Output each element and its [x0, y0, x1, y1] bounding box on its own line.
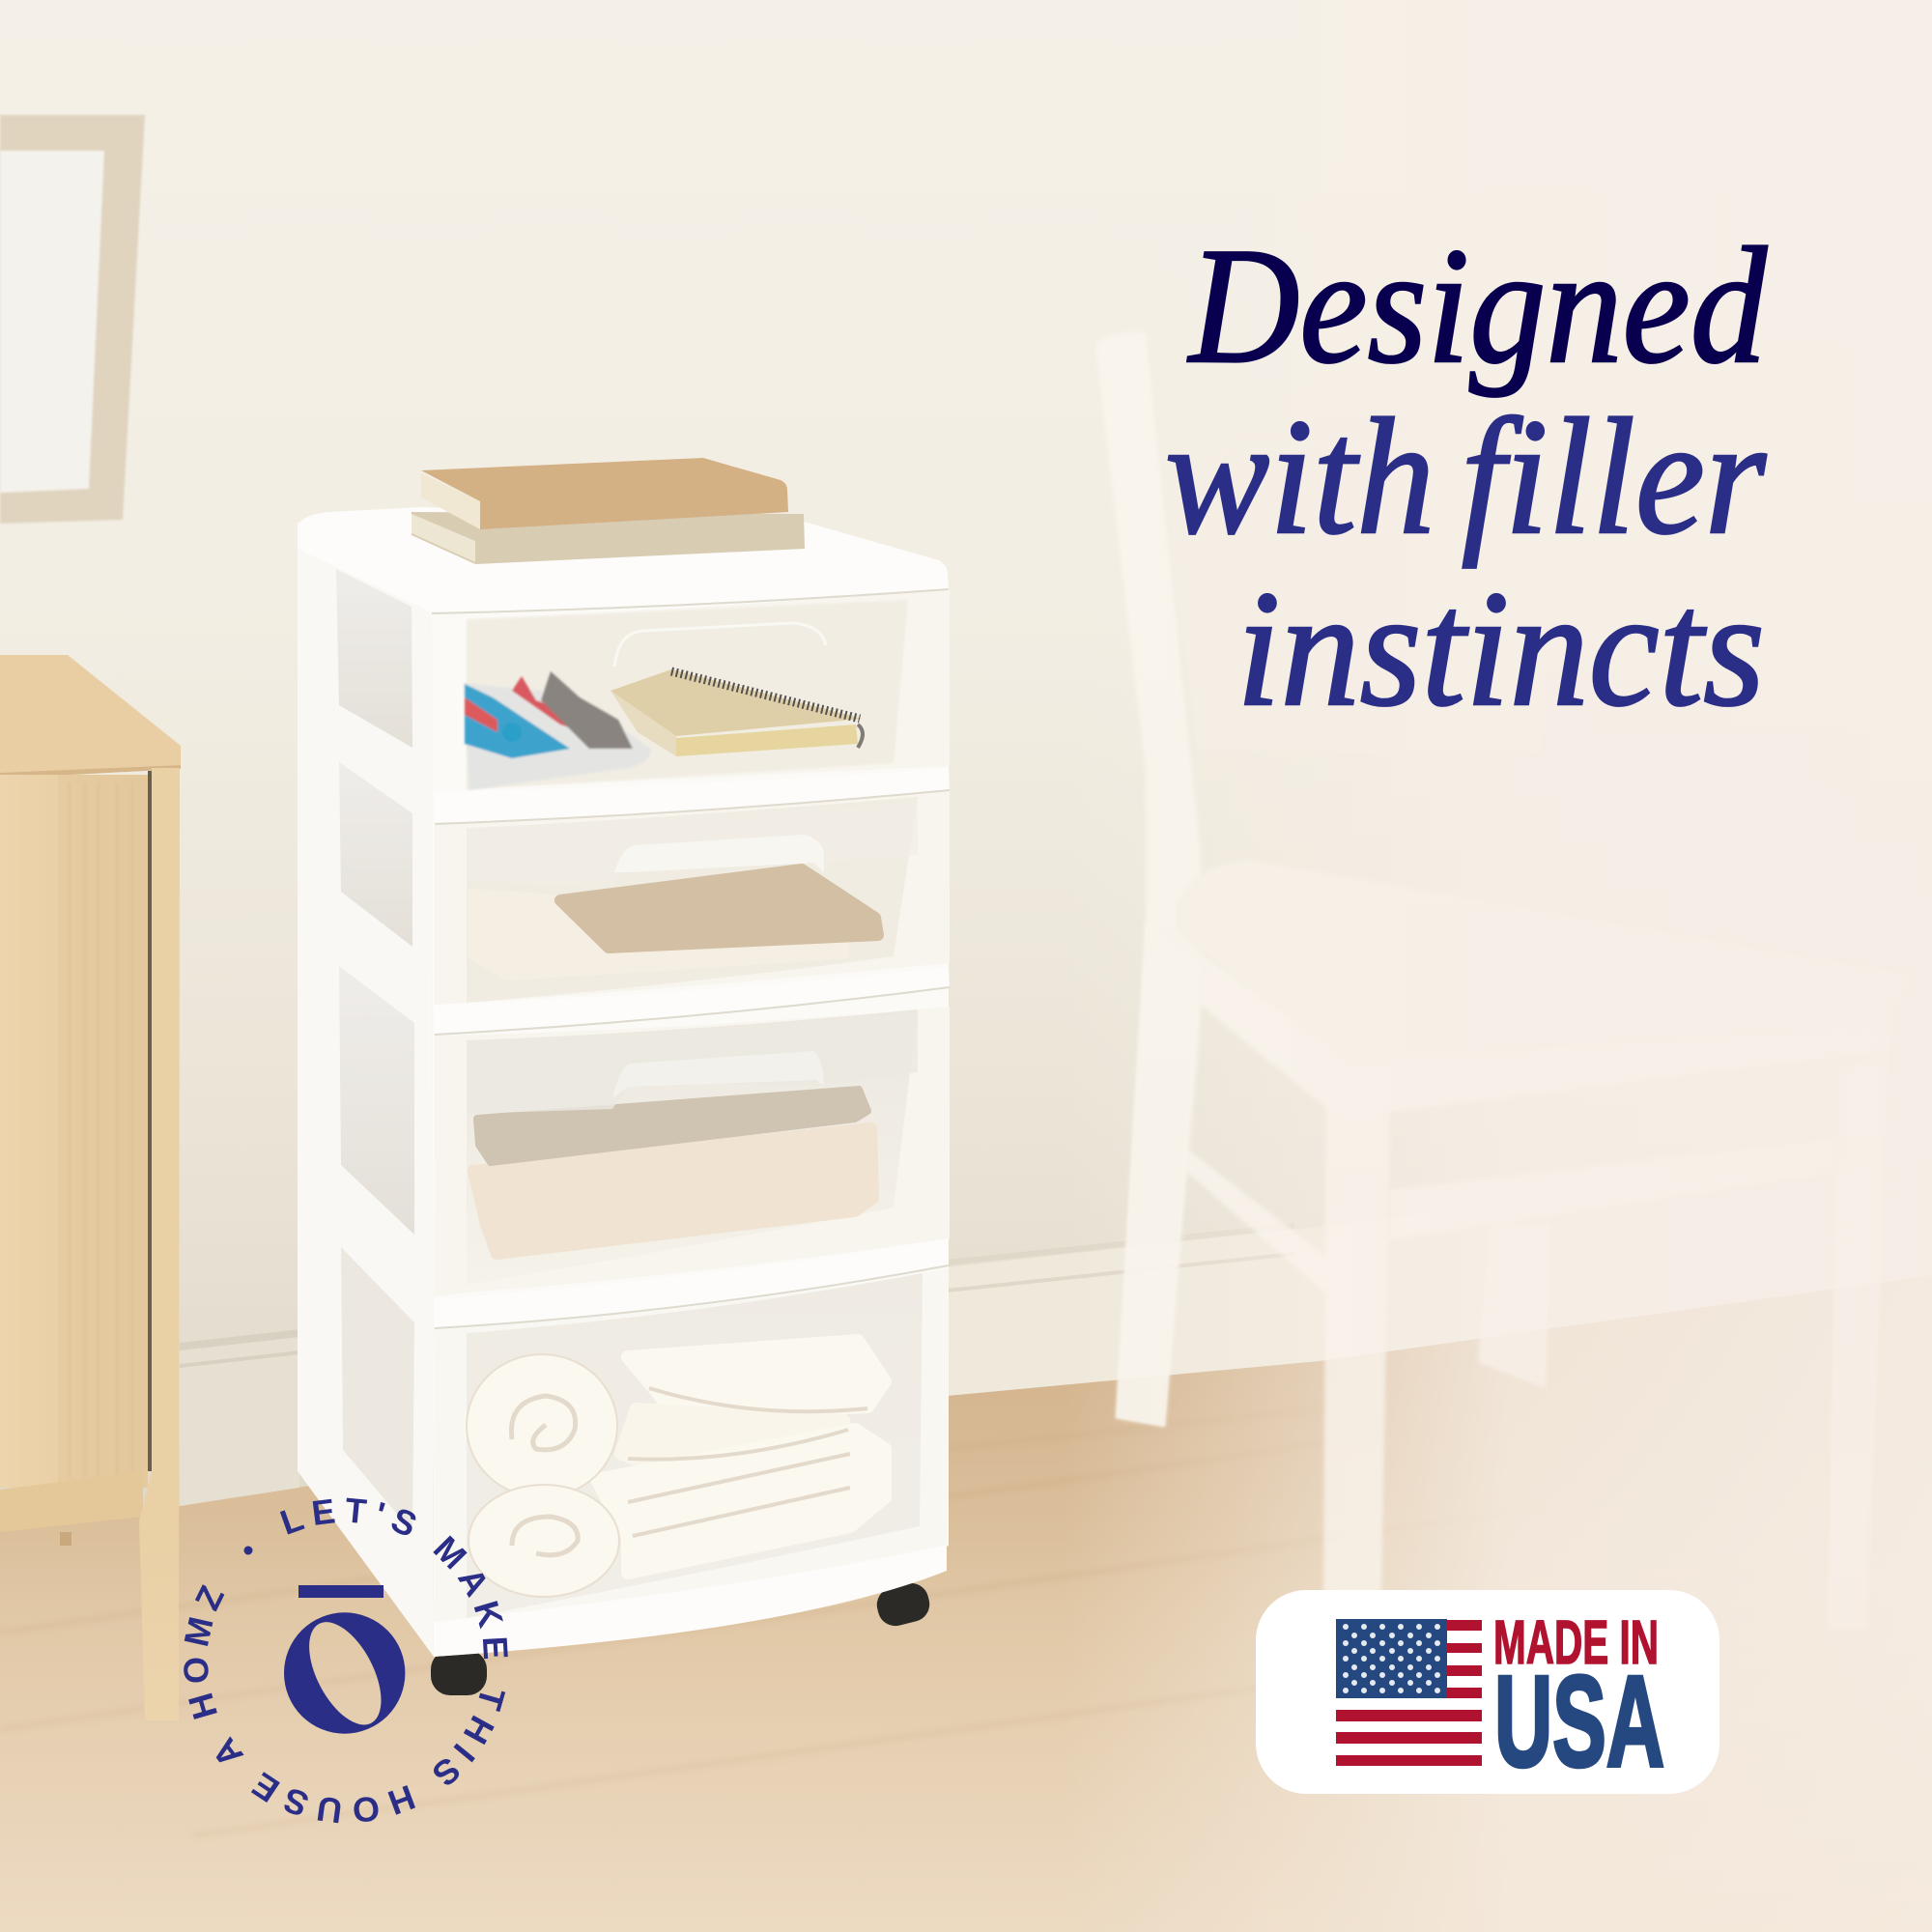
badge text: MADE IN: MADE IN [1493, 1607, 1659, 1677]
tray with stationery [464, 671, 651, 790]
drawer 1 panel [464, 588, 950, 790]
wall [0, 0, 1932, 1507]
top cap [298, 507, 949, 612]
badge background [1256, 1590, 1719, 1794]
white folded towel [471, 894, 844, 976]
heading line 3: instincts [1236, 557, 1765, 741]
waffle towel [560, 869, 878, 948]
storage drawer unit [298, 458, 950, 1695]
wooden cabinet [0, 655, 181, 1720]
drawer rails [434, 768, 950, 1657]
logo ring [284, 1612, 405, 1734]
drawer 3 panel [435, 1007, 950, 1296]
picture frame on wall [0, 115, 145, 524]
US flag [1336, 1619, 1482, 1766]
logo bar [298, 1585, 384, 1598]
drawer 2 panel [435, 791, 950, 1005]
towel stack [597, 1341, 885, 1573]
brand seal [184, 1497, 508, 1824]
side frame [298, 522, 434, 1657]
back folded towel [628, 1341, 885, 1416]
rolled towel lower [469, 1485, 619, 1597]
badge text: USA: USA [1494, 1650, 1664, 1794]
stacked books [412, 458, 805, 564]
lower large towel [597, 1430, 885, 1573]
middle towel [620, 1408, 844, 1462]
drawer 1 handle [614, 623, 826, 667]
upper book [421, 458, 788, 529]
chair [1095, 332, 1911, 1630]
side panels [336, 569, 414, 1532]
caster wheels [431, 1579, 933, 1695]
rolled towel upper [467, 1354, 617, 1497]
drawer 4 panel [435, 1268, 949, 1623]
lower book [412, 512, 805, 564]
heading line 1: Designed [1187, 214, 1768, 398]
seal separator dot [243, 1546, 253, 1555]
notebook [611, 669, 863, 756]
rail shadow lines [432, 589, 950, 1328]
drawer 2 handle and lip [467, 802, 918, 888]
floor [0, 1275, 1932, 1932]
towel fold shadows [628, 1388, 867, 1536]
baseboard [180, 1159, 1932, 1506]
chair rear leg [1116, 923, 1201, 1427]
circular slogan text: LET'S MAKE THIS HOUSE A HOMZ [184, 1497, 508, 1824]
drawer 3 handle and lip [467, 1012, 918, 1114]
front frame [432, 585, 949, 1657]
cream blanket [473, 1128, 873, 1254]
heading line 2: with filler [1165, 385, 1767, 569]
taupe blanket [477, 1090, 867, 1162]
heading: Designed with filler instincts [1165, 214, 1768, 741]
floor wood grain [0, 1406, 1546, 1835]
Made in USA badge [1256, 1590, 1719, 1794]
